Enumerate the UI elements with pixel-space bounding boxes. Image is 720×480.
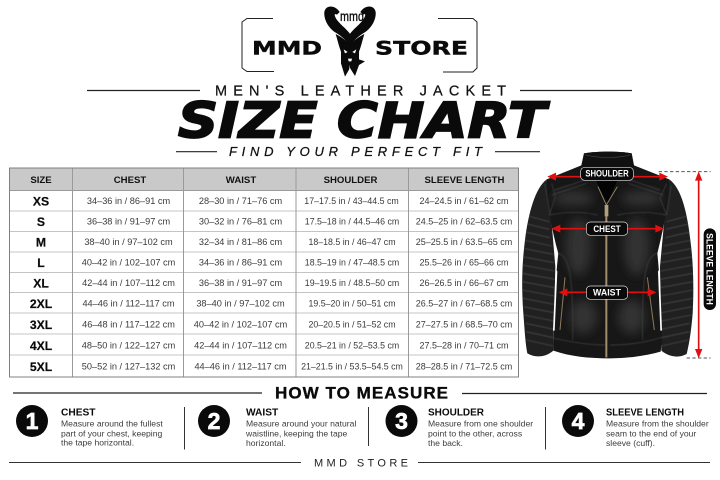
pocket zippers [560,277,654,330]
row 2XL: 2XL [30,297,53,311]
row L: L [37,256,45,270]
collar [581,152,634,179]
step 4: sleeve length [562,405,709,448]
step 3: shoulder: Measure from one shoulder [428,418,533,428]
logo: MMD Store [242,6,477,77]
row XL [33,276,509,290]
measurement: chest: CHEST [593,224,621,234]
right sleeve [660,179,693,357]
icon: goat head with horns [324,6,376,77]
row 4XL: 48–50 in / 122–127 cm [82,340,176,350]
row S: 24.5–25 in / 62–63.5 cm [416,216,512,226]
row XS: XS [33,194,49,208]
logo wordmark right: STORE [375,38,468,60]
step 4: sleeve length: sleeve (cuff). [606,438,655,448]
row S: 36–38 in / 91–97 cm [87,216,170,226]
measurement: shoulder [547,167,668,181]
measurement: chest [552,222,664,235]
row XL: 26–26.5 in / 66–67 cm [419,278,509,288]
row L [37,256,509,270]
row XL: 42–44 in / 107–112 cm [82,278,175,288]
row S: 30–32 in / 76–81 cm [199,216,282,226]
row 3XL: 20–20.5 in / 51–52 cm [308,320,396,330]
icon: number 3 [386,405,418,437]
row 4XL: 42–44 in / 107–112 cm [194,340,287,350]
row 3XL: 3XL [30,318,53,332]
icon: number 4: 4 [572,408,585,434]
row 3XL: 40–42 in / 102–107 cm [194,320,288,330]
step 2: waist: WAIST [246,408,279,418]
icon: number 2: 2 [208,408,220,434]
measurement: waist [559,286,656,299]
step 3: shoulder: SHOULDER [428,408,485,418]
size table [10,168,518,377]
row S: S [37,215,45,229]
step 3: shoulder [386,405,533,448]
icon: number 2 [198,405,230,437]
row XL: 19–19.5 in / 48.5–50 cm [305,278,399,288]
jacket body [547,152,669,358]
measurement: waist: WAIST [593,288,621,298]
table header row: WAIST [226,175,256,186]
row L: 25.5–26 in / 65–66 cm [419,258,509,268]
step 1: chest: the tape horizontal. [61,438,134,448]
row L: 18.5–19 in / 47–48.5 cm [305,258,399,268]
heading: How to measure: HOW TO MEASURE [275,384,448,402]
row L: 40–42 in / 102–107 cm [82,258,176,268]
footer: MMD Store: MMD STORE [314,458,408,470]
row XL: XL [33,276,49,290]
step 2: waist: horizontal. [246,438,286,448]
row 3XL: 46–48 in / 117–122 cm [82,320,175,330]
icon: number 4 [562,405,594,437]
jacket photo illustration [522,152,693,358]
icon: number 3: 3 [395,408,408,434]
left sleeve [522,179,555,356]
row S [37,215,512,229]
step 3: shoulder: the back. [428,438,463,448]
table header row: CHEST [114,175,146,186]
row L: 34–36 in / 86–91 cm [199,258,282,268]
step 4: sleeve length: Measure from the shoulder [606,418,709,428]
step 2: waist: waistline, keeping the tape [245,428,348,438]
row XL: 36–38 in / 91–97 cm [199,278,282,288]
logo frame brackets [242,18,477,72]
step 4: sleeve length: SLEEVE LENGTH [606,408,684,418]
subtitle: Men's Leather Jacket: MEN'S LEATHER JACKET [215,84,506,100]
step 1: chest: Measure around the fullest [61,418,163,428]
row 5XL: 50–52 in / 127–132 cm [82,362,176,372]
row 2XL: 19.5–20 in / 50–51 cm [308,298,396,308]
row M: 32–34 in / 81–86 cm [199,237,282,247]
row 5XL: 44–46 in / 112–117 cm [194,362,287,372]
quilted sleeves [522,215,693,346]
row 2XL: 38–40 in / 97–102 cm [196,298,285,308]
row XS [33,194,509,208]
jacket diagram [522,152,716,358]
row 4XL: 4XL [30,339,53,353]
gaps between sleeve and body [553,268,662,331]
row 4XL: 27.5–28 in / 70–71 cm [419,340,509,350]
step 2: waist [198,405,356,448]
row 3XL: 27–27.5 in / 68.5–70 cm [416,320,512,330]
icon: number 1: 1 [26,408,39,434]
step 2: waist: Measure around your natural [246,418,356,428]
step 3: shoulder: point to the other, across [428,428,522,438]
measurement: sleeve length: SLEEVE LENGTH [705,233,715,305]
row XS: 24–24.5 in / 61–62 cm [419,196,509,206]
inner neck [596,181,617,203]
table header row: SHOULDER [324,175,377,186]
row XS: 17–17.5 in / 43–44.5 cm [304,196,399,206]
row 5XL [30,360,512,374]
row 2XL: 26.5–27 in / 67–68.5 cm [416,298,512,308]
tagline: Find your perfect fit: FIND YOUR PERFECT FIT [229,144,483,159]
row M: 18–18.5 in / 46–47 cm [308,237,396,247]
step 1: chest: part of your chest, keeping [61,428,162,438]
logo small mmd text: mmd [340,9,364,24]
center zipper [598,187,617,357]
logo wordmark left: MMD [252,38,322,60]
row 5XL: 21–21.5 in / 53.5–54.5 cm [301,362,403,372]
row M: 38–40 in / 97–102 cm [84,237,173,247]
step 4: sleeve length: seam to the end of your [606,428,696,438]
row 2XL: 44–46 in / 112–117 cm [82,298,175,308]
measurement: sleeve length [659,171,716,358]
seam lines [545,178,671,345]
step 1: chest [16,405,163,448]
step 1: chest: CHEST [61,408,96,418]
row M: 25–25.5 in / 63.5–65 cm [416,237,512,247]
icon: number 1 [16,405,48,437]
row S: 17.5–18 in / 44.5–46 cm [305,216,399,226]
row M [36,236,512,250]
row XS: 34–36 in / 86–91 cm [87,196,170,206]
row M: M [36,236,46,250]
row 5XL: 28–28.5 in / 71–72.5 cm [416,362,512,372]
row 2XL [30,297,512,311]
row 4XL: 20.5–21 in / 52–53.5 cm [305,340,399,350]
table header row: SIZE [30,175,52,186]
title: Size Chart: SIZE CHART [178,92,550,150]
row 4XL [30,339,509,353]
row XS: 28–30 in / 71–76 cm [199,196,282,206]
row 5XL: 5XL [30,360,53,374]
table header row [10,168,518,190]
leather highlights [553,191,662,333]
row 3XL [30,318,512,332]
measurement: shoulder: SHOULDER [585,169,629,179]
table header row: SLEEVE LENGTH [425,175,505,186]
